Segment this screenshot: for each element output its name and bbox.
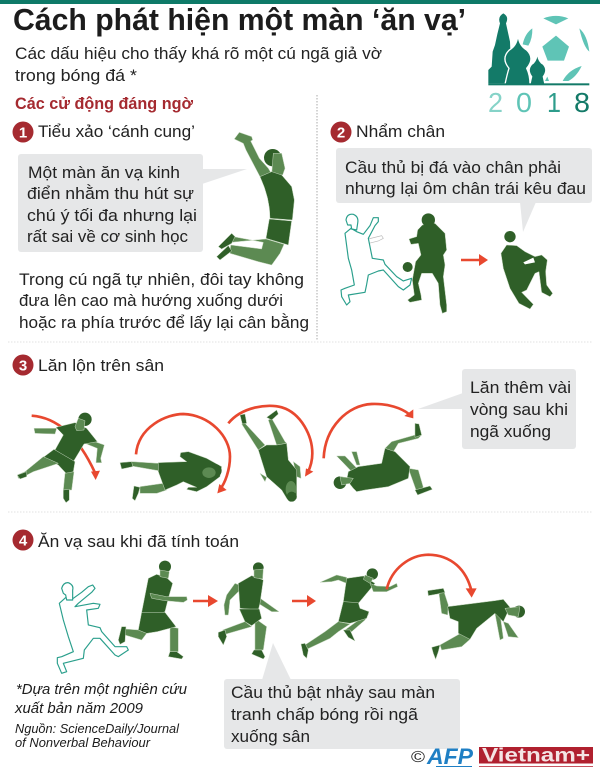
figure: falling player: [428, 588, 525, 659]
arrow 3c: [228, 406, 313, 477]
callout 3: Lăn thêm vài: [470, 378, 571, 397]
icon: 2018 logo: [488, 13, 590, 118]
heading 2: Nhẩm chân: [356, 122, 445, 141]
figure: roll step 1: [17, 413, 104, 503]
footnote: Nguồn: ScienceDaily/Journal: [15, 722, 180, 736]
heading 4: Ăn vạ sau khi đã tính toán: [38, 532, 239, 551]
callout 1: rất sai về cơ sinh học: [27, 227, 188, 246]
badge 2: [330, 122, 352, 142]
explanation text: Trong cú ngã tự nhiên, đôi tay không: [19, 270, 304, 289]
callout 2: Cầu thủ bị đá vào chân phải: [345, 158, 561, 177]
explanation text: hoặc ra phía trước để lấy lại cân bằng: [19, 313, 309, 332]
arrow 4b: [292, 595, 316, 607]
badge 2: 2: [337, 124, 345, 142]
callout 3: vòng sau khi: [470, 400, 568, 419]
title: Cách phát hiện một màn ‘ăn vạ’: [13, 3, 466, 37]
icon: 2018 logo: 0: [516, 87, 532, 118]
callout 4: [224, 643, 460, 749]
callout 2: nhưng lại ôm chân trái kêu đau: [345, 179, 586, 198]
callout 4: xuống sân: [231, 727, 310, 746]
badge 1: 1: [19, 124, 27, 142]
figure: roll step 4: [334, 423, 432, 495]
arrow 3d: [324, 404, 413, 458]
icon: 2018 logo: 8: [574, 87, 590, 118]
panel: 3 rolling: [12, 354, 576, 503]
figure: sitting player: [501, 231, 553, 309]
arrow 3a: [32, 416, 100, 480]
arrow 3b: [136, 414, 230, 493]
figure: runner 2: [218, 562, 279, 659]
badge 3: [12, 354, 34, 376]
figure: bow arched player: [217, 132, 294, 265]
explanation text: [19, 270, 309, 332]
icon: 2018 logo: 2: [488, 87, 503, 118]
footnote: *Dựa trên một nghiên cứu: [16, 682, 187, 698]
callout 1: chú ý tối đa nhưng lại: [27, 206, 197, 225]
credit: Vietnam+: [436, 746, 593, 767]
arrow 4c: [387, 555, 477, 598]
badge 3: 3: [19, 358, 27, 374]
panel: 4 calculated: [12, 530, 525, 749]
subtitle: trong bóng đá *: [15, 66, 137, 85]
subtitle: Các dấu hiệu cho thấy khá rõ một cú ngã giả vờ: [15, 44, 382, 63]
callout 2: [336, 148, 592, 232]
section heading: Các cử động đáng ngờ: [15, 94, 194, 113]
figure: outline kicker: [341, 214, 412, 305]
callout 1: Một màn ăn vạ kinh: [28, 163, 180, 182]
figure: roll step 2: [120, 452, 222, 501]
figure: runner 1: [118, 561, 187, 659]
badge 4: 4: [19, 532, 28, 550]
figure: player with ball: [403, 213, 447, 313]
heading 1: Tiểu xảo ‘cánh cung’: [38, 122, 195, 141]
badge 1: [12, 122, 34, 142]
panel: 2 wrong leg: [330, 122, 592, 313]
callout 3: [418, 369, 576, 449]
figure: runner 3: [301, 568, 398, 658]
footnote: xuất bản năm 2009: [14, 701, 143, 717]
callout 3: ngã xuống: [470, 422, 551, 441]
footnote: of Nonverbal Behaviour: [15, 736, 151, 750]
callout 4: tranh chấp bóng rồi ngã: [231, 705, 419, 724]
badge 4: [12, 530, 34, 550]
heading 3: Lăn lộn trên sân: [38, 356, 164, 375]
figure: outline tackler: [57, 583, 128, 673]
explanation text: đưa lên cao mà hướng xuống dưới: [19, 291, 283, 310]
arrow 4a: [193, 595, 218, 607]
credit: Vietnam+: Vietnam+: [482, 746, 590, 766]
callout 1: điển nhằm thu hút sự: [27, 184, 194, 203]
arrow 2: [461, 254, 488, 266]
footnote: [14, 682, 187, 750]
panel: 1 bow trick: [12, 122, 309, 332]
figure: roll step 3: [240, 410, 301, 502]
callout 4: Cầu thủ bật nhảy sau màn: [231, 683, 435, 702]
callout 1: [18, 154, 247, 252]
icon: 2018 logo: 1: [547, 87, 561, 118]
subtitle: [15, 44, 382, 85]
credit: AFP: ©: [411, 749, 425, 766]
